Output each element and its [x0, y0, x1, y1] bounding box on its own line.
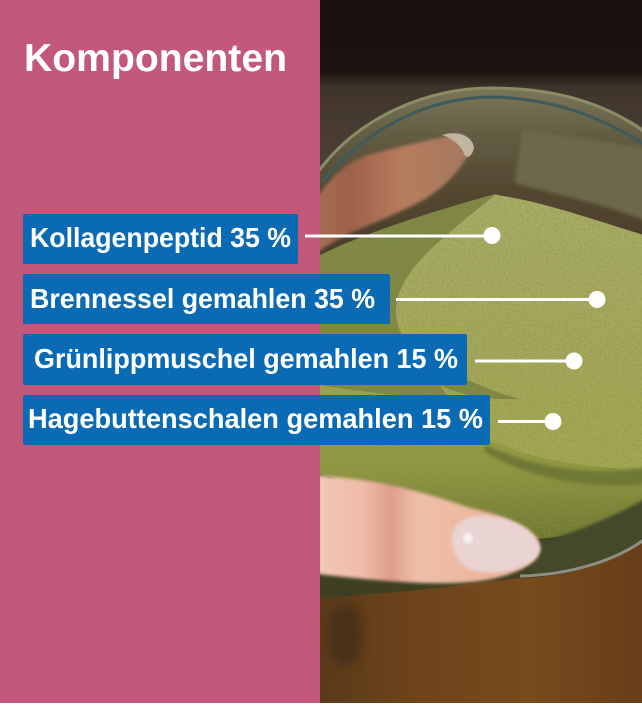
lower powder bed	[318, 385, 642, 540]
label box	[23, 214, 298, 264]
label text: Hagebuttenschalen gemahlen 15 %	[28, 403, 483, 434]
back powder mound	[320, 194, 520, 478]
painted fingernail	[452, 515, 540, 573]
rim lower edge	[520, 535, 642, 576]
blurred dark table spot	[327, 603, 363, 667]
pointer: Grünlippmuschel	[475, 352, 582, 370]
dark upper background	[320, 0, 642, 167]
pointer: Kollagenpeptid	[305, 227, 500, 244]
label text: Kollagenpeptid 35 %	[30, 222, 291, 253]
rim outer highlight	[318, 88, 642, 172]
pointer: Hagebuttenschalen	[498, 413, 562, 430]
label box	[23, 274, 390, 324]
left pink panel	[0, 0, 320, 703]
dish glass rim	[318, 88, 642, 576]
label: Brennessel	[23, 274, 390, 324]
brown table surface	[320, 543, 642, 703]
photo: hands holding a glass dish of green powder	[300, 0, 642, 703]
title: Komponenten	[24, 37, 287, 80]
label text: Grünlippmuschel gemahlen 15 %	[34, 343, 458, 374]
nail highlight	[463, 533, 473, 543]
fingernail behind glass	[442, 133, 474, 157]
label: Kollagenpeptid	[23, 214, 298, 264]
upper finger behind glass	[318, 134, 471, 252]
dish interior	[300, 85, 642, 605]
label text: Brennessel gemahlen 35 %	[30, 283, 375, 314]
second powder layer	[440, 385, 642, 468]
label: Grünlippmuschel	[23, 334, 467, 385]
rim inner blue line	[322, 97, 642, 182]
main powder mound	[396, 195, 642, 406]
label box	[23, 395, 490, 445]
label box	[23, 334, 467, 385]
lower bowl shadow	[532, 498, 642, 577]
pointer: Brennessel	[396, 291, 606, 308]
lower finger	[318, 476, 540, 583]
powder reflection on glass wall	[515, 130, 642, 225]
glass dish	[300, 85, 642, 605]
label: Hagebuttenschalen	[23, 395, 490, 445]
shadow under second layer	[485, 445, 642, 485]
